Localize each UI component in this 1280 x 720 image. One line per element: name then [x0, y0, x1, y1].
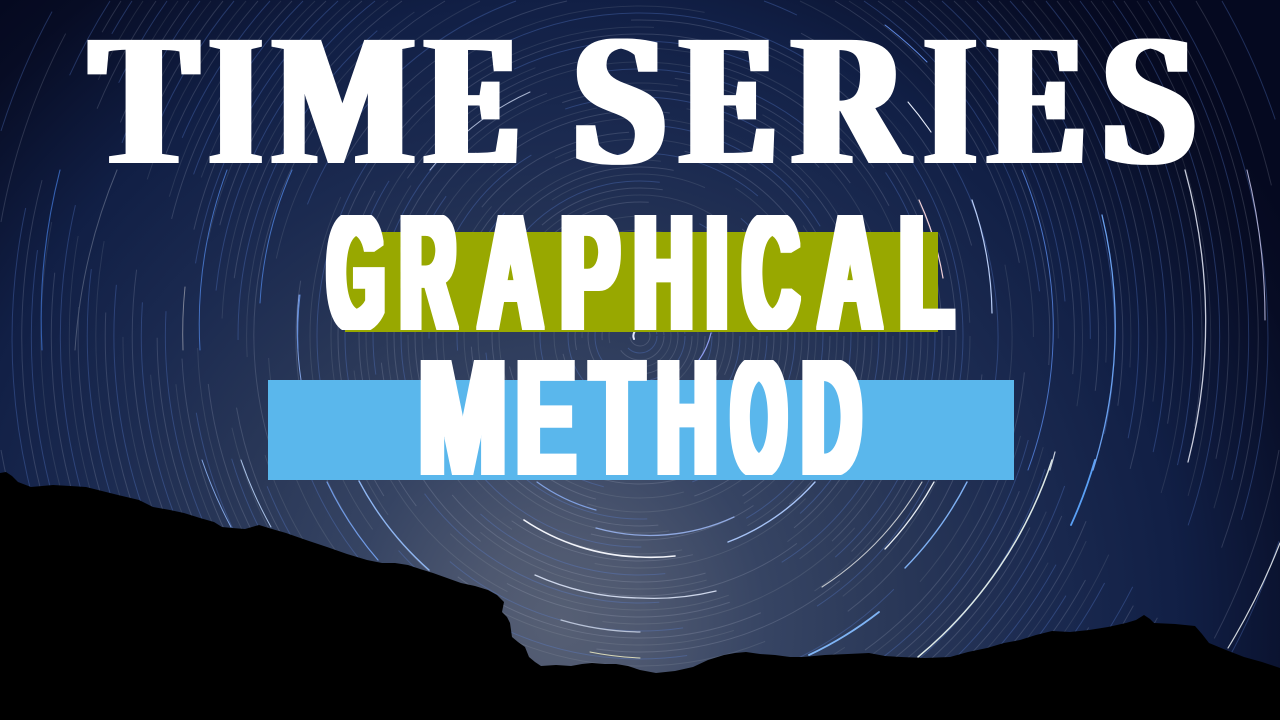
highlight bar: blue — [268, 380, 1014, 480]
heading: GRAPHICAL: C — [743, 180, 798, 364]
heading: METHOD — [420, 360, 862, 475]
title: TIME SERIES: S — [573, 0, 666, 204]
title: TIME SERIES: T — [91, 0, 197, 204]
title: TIME SERIES: S — [1102, 0, 1196, 204]
highlight bar: green — [345, 232, 938, 332]
title: TIME SERIES: I — [211, 0, 260, 204]
title: TIME SERIES — [91, 0, 1196, 204]
title: TIME SERIES: E — [427, 0, 518, 204]
mountain silhouette — [0, 472, 1280, 720]
heading: GRAPHICAL: P — [561, 180, 619, 364]
title: TIME SERIES: M — [275, 0, 413, 204]
heading: METHOD: E — [517, 325, 575, 509]
title: TIME SERIES: E — [682, 0, 776, 204]
heading: METHOD: T — [591, 325, 643, 509]
heading: GRAPHICAL: A — [479, 180, 542, 364]
text: D — [802, 325, 861, 509]
heading: METHOD: M — [419, 325, 507, 509]
title: TIME SERIES: R — [794, 0, 908, 204]
title: TIME SERIES: E — [990, 0, 1085, 204]
heading: GRAPHICAL — [326, 215, 956, 330]
heading: GRAPHICAL: G — [328, 180, 384, 364]
heading: GRAPHICAL: I — [707, 180, 727, 364]
heading: METHOD: O — [732, 325, 786, 509]
heading: GRAPHICAL: R — [400, 180, 456, 364]
heading: GRAPHICAL: L — [899, 180, 953, 364]
title: TIME SERIES: I — [926, 0, 974, 204]
heading: GRAPHICAL: H — [634, 180, 693, 364]
heading: METHOD: H — [657, 325, 717, 509]
heading: GRAPHICAL: A — [819, 180, 881, 364]
